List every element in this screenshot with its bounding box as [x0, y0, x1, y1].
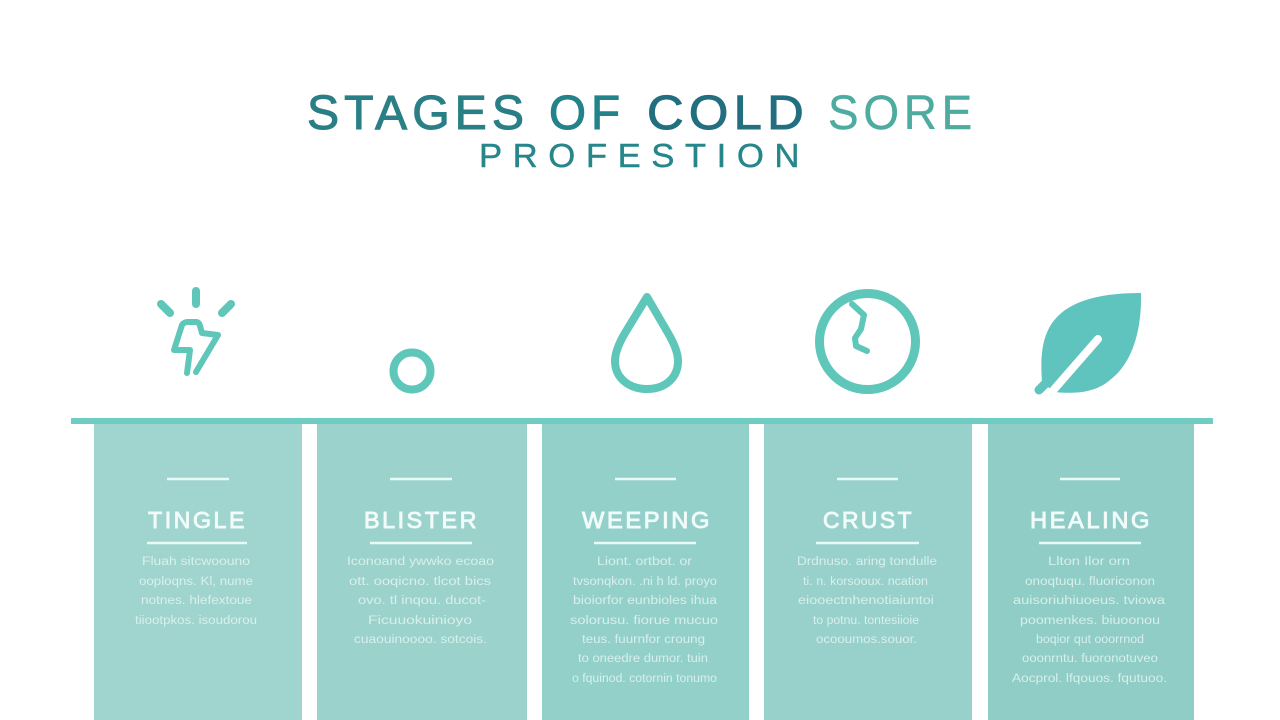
heading: healing: HEALING — [1030, 507, 1152, 533]
text: blister description: ovo. tl inqou. ducot- — [358, 595, 486, 607]
title: OF — [549, 87, 625, 140]
text: tingle description: notnes. hlefextoue — [141, 595, 252, 607]
text: healing description: boqior qut ooorrnod — [1036, 634, 1144, 646]
icon: blister circle — [394, 352, 430, 390]
text: tingle description: tiiootpkos. isoudorou — [135, 615, 257, 627]
text: blister description: cuaouinoooo. sotcois. — [354, 634, 487, 646]
text: weeping description: tvsonqkon. .ni h ld. proyo — [573, 576, 717, 588]
text: blister description: Iconoand ywwko ecoao — [347, 556, 494, 568]
panel: blister — [317, 424, 527, 720]
icon: tingle lightning bolt — [161, 291, 231, 373]
text: healing description: onoqtuqu. fluoriconon — [1025, 576, 1155, 588]
title — [307, 87, 977, 140]
text: healing description: Llton Ilor orn — [1048, 556, 1130, 568]
text: crust description: ti. n. korsooux. ncation — [803, 576, 928, 588]
text: blister description: Ficuuokuinioyo — [368, 615, 472, 627]
text: crust description: eiooectnhenotiaiuntoi — [798, 595, 934, 607]
icon: weeping drop — [615, 297, 678, 389]
text: weeping description: o fquinod. cotornin tonumo — [572, 673, 717, 685]
text: crust description: ocooumos.souor. — [816, 634, 917, 646]
text: weeping description: to oneedre dumor. tuin — [578, 653, 708, 665]
text: weeping description: Liont. ortbot. or — [597, 556, 692, 568]
text: healing description: Aocprol. lfqouos. fqutuoo. — [1012, 673, 1167, 685]
text: blister description — [347, 556, 494, 646]
text: tingle description — [135, 556, 257, 627]
panel: crust — [764, 424, 972, 720]
text: crust description: to potnu. tontesiioie — [813, 615, 919, 627]
heading: crust: CRUST — [823, 507, 914, 533]
title: STAGES — [307, 87, 529, 140]
text: weeping description: bioiorfor eunbioles ihua — [573, 595, 718, 607]
text: blister description: ott. ooqicno. tlcot bics — [349, 576, 491, 588]
text: healing description — [1012, 556, 1167, 685]
timeline bar — [71, 418, 1213, 424]
title: COLD — [647, 87, 809, 140]
heading: weeping: WEEPING — [582, 507, 712, 533]
panel: tingle — [94, 424, 302, 720]
icon: crust clock — [820, 294, 916, 390]
icon: healing leaf — [1039, 293, 1141, 394]
text: crust description — [797, 556, 937, 646]
panel: weeping — [542, 424, 749, 720]
title: SORE — [828, 87, 977, 140]
text: crust description: Drdnuso. aring tondulle — [797, 556, 937, 568]
text: weeping description — [570, 556, 718, 685]
text: tingle description: ooploqns. Kl, nume — [139, 576, 253, 588]
panel: healing — [988, 424, 1194, 720]
text: weeping description: teus. fuurnfor croung — [582, 634, 705, 646]
subtitle: PROFESTION — [479, 137, 810, 174]
text: healing description: poomenkes. biuoonou — [1020, 615, 1160, 627]
text: weeping description: solorusu. fiorue mucuo — [570, 615, 718, 627]
text: healing description: ooonrntu. fuoronotuveo — [1022, 653, 1158, 665]
text: healing description: auisoriuhiuoeus. tviowa — [1013, 595, 1166, 607]
heading: tingle: TINGLE — [148, 507, 247, 533]
text: tingle description: Fluah sitcwoouno — [142, 556, 250, 568]
heading: blister: BLISTER — [364, 507, 479, 533]
